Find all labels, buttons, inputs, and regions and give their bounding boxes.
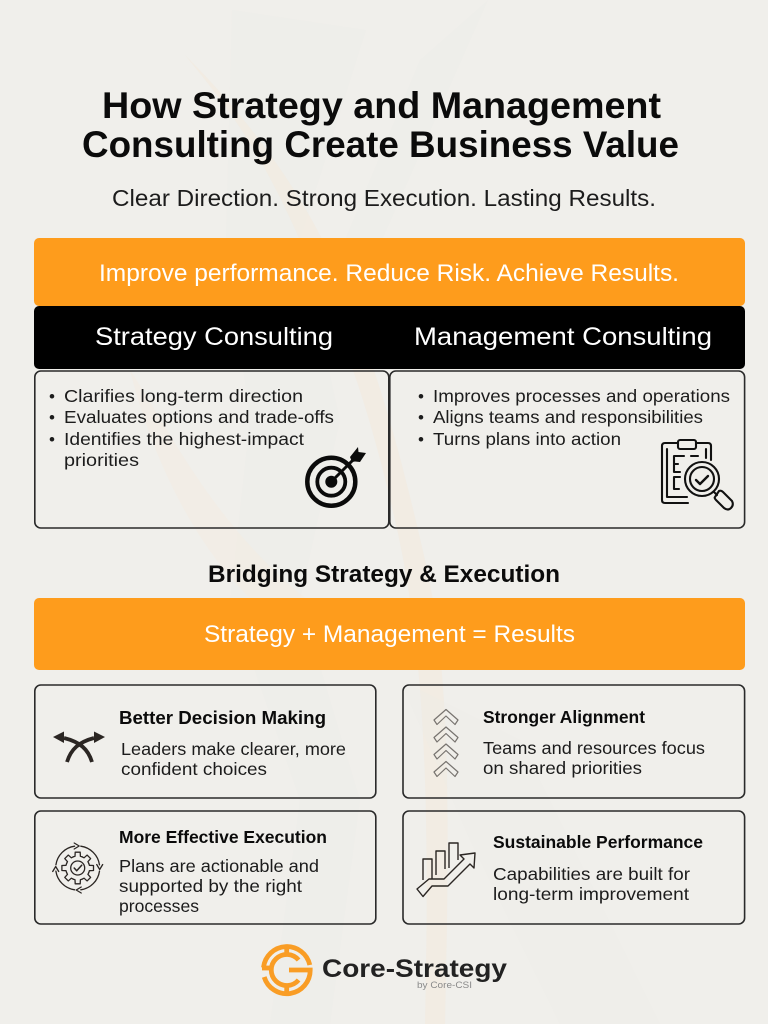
logo: Core-Strategy: by Core-CSI bbox=[417, 980, 472, 990]
card: stronger alignment: Stronger Alignment bbox=[483, 707, 645, 727]
icon: stacked chevrons bbox=[434, 710, 458, 776]
subtitle: Clear Direction. Strong Execution. Lasting Results. bbox=[112, 185, 656, 211]
bullet list: strategy: Identifies the highest-impact bbox=[64, 429, 304, 449]
icon: logo mark bbox=[262, 946, 310, 994]
bullet list: management: Turns plans into action bbox=[433, 429, 621, 449]
header bar: consulting types: Management Consulting bbox=[414, 323, 712, 351]
header bar: consulting types bbox=[34, 306, 745, 369]
card: stronger alignment: on shared priorities bbox=[483, 758, 642, 778]
card: better decision making bbox=[35, 685, 376, 798]
bullet list: strategy: • bbox=[49, 430, 55, 449]
card: more effective execution: supported by the right bbox=[119, 876, 302, 896]
banner: strategy equation bbox=[34, 598, 745, 670]
card: stronger alignment bbox=[403, 685, 745, 798]
icon: clipboard with magnifier bbox=[662, 440, 733, 510]
bullet list: strategy: Evaluates options and trade-offs bbox=[64, 407, 334, 427]
bullet list: management: Aligns teams and responsibilities bbox=[433, 407, 703, 427]
title: How Strategy and Management bbox=[102, 85, 661, 126]
bullet list: management bbox=[418, 386, 730, 449]
bullet list: strategy: Clarifies long-term direction bbox=[64, 386, 303, 406]
icon: rising bar chart arrow bbox=[417, 843, 475, 896]
card: more effective execution: processes bbox=[119, 896, 199, 916]
banner: strategy equation: Strategy + Management = Results bbox=[204, 621, 575, 648]
card: better decision making: confident choices bbox=[121, 759, 267, 779]
header bar: consulting types: Strategy Consulting bbox=[95, 323, 333, 351]
card: better decision making: Better Decision Making bbox=[119, 708, 326, 728]
bullet list: strategy: • bbox=[49, 408, 55, 427]
banner: improve performance: Improve performance. Reduce Risk. Achieve Results. bbox=[99, 260, 679, 287]
panel: strategy consulting bbox=[35, 371, 389, 528]
banner: improve performance bbox=[34, 238, 745, 306]
card: sustainable performance: Capabilities are built for bbox=[493, 864, 690, 884]
card: sustainable performance bbox=[403, 811, 745, 924]
bullet list: strategy: • bbox=[49, 387, 55, 406]
card: more effective execution bbox=[35, 811, 376, 924]
logo: Core-Strategy bbox=[262, 946, 507, 994]
logo: Core-Strategy: Core-Strategy bbox=[322, 955, 507, 983]
bullet list: management: • bbox=[418, 430, 424, 449]
card: sustainable performance: Sustainable Performance bbox=[493, 832, 703, 852]
card: stronger alignment: Teams and resources focus bbox=[483, 738, 705, 758]
panel: management consulting bbox=[390, 371, 745, 528]
card: sustainable performance: long-term improvement bbox=[493, 884, 689, 904]
card: better decision making: Leaders make clearer, more bbox=[121, 739, 346, 759]
bullet list: management: • bbox=[418, 387, 424, 406]
title: Consulting Create Business Value bbox=[82, 124, 679, 165]
bullet list: management: Improves processes and operations bbox=[433, 386, 730, 406]
title bbox=[82, 85, 679, 165]
bullet list: strategy: priorities bbox=[64, 450, 139, 470]
icon: target with arrow bbox=[307, 447, 366, 506]
icon: crossing arrows bbox=[53, 732, 105, 762]
card: more effective execution: More Effective Execution bbox=[119, 827, 327, 847]
card: more effective execution: Plans are actionable and bbox=[119, 856, 319, 876]
bullet list: management: • bbox=[418, 408, 424, 427]
bullet list: strategy bbox=[49, 386, 334, 470]
icon: gear with cycle arrows bbox=[53, 843, 103, 893]
heading: bridging strategy: Bridging Strategy & Execution bbox=[208, 561, 560, 588]
